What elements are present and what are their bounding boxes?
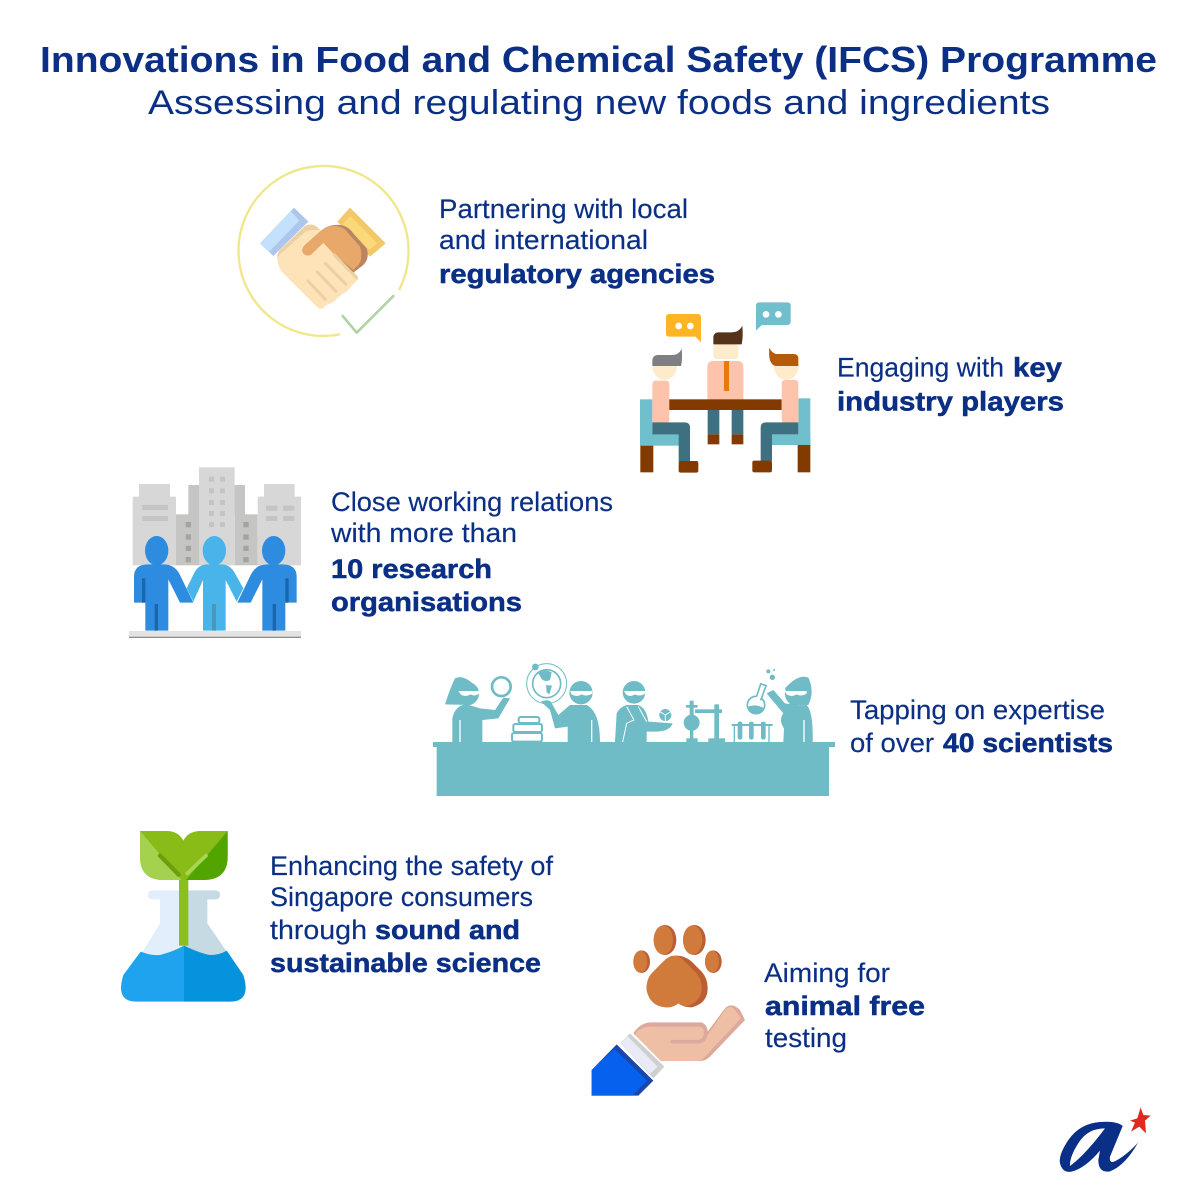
text: key industry players: key bbox=[1013, 352, 1062, 382]
icon: plant in flask bbox=[121, 831, 246, 1002]
text: scientists: Tapping on expertise bbox=[850, 695, 1105, 725]
text: scientists bbox=[850, 695, 1113, 758]
icon: handshake in circle bbox=[239, 166, 408, 336]
text: animal free testing: Aiming for bbox=[764, 958, 890, 988]
text: research organisations bbox=[330, 487, 613, 617]
text: regulatory agencies: Partnering with local bbox=[439, 194, 688, 224]
text: sustainable science: Singapore consumers bbox=[270, 882, 533, 912]
text: research organisations: Close working relations bbox=[331, 487, 613, 517]
scientist with flask bbox=[747, 669, 813, 742]
icon: meeting at table bbox=[640, 302, 810, 473]
text: sustainable science bbox=[270, 851, 553, 978]
text: research organisations: organisations bbox=[331, 587, 522, 617]
lab equipment bbox=[684, 701, 773, 742]
text: sustainable science: through bbox=[270, 915, 367, 945]
title: Innovations in Food and Chemical Safety (IFCS) Programme bbox=[40, 39, 1157, 80]
scientist with globe bbox=[527, 664, 600, 742]
text: key industry players: Engaging with bbox=[837, 352, 1004, 382]
text: sustainable science: sound and bbox=[375, 915, 520, 945]
text: research organisations: with more than bbox=[330, 518, 517, 548]
text: scientists: 40 scientists bbox=[943, 728, 1113, 758]
books bbox=[512, 717, 542, 742]
icon: scientists at lab bench bbox=[433, 664, 835, 796]
text: sustainable science: Enhancing the safety of bbox=[270, 851, 553, 881]
text: sustainable science: sustainable science bbox=[270, 948, 541, 978]
text: regulatory agencies: and international bbox=[439, 225, 648, 255]
text: animal free testing bbox=[764, 958, 925, 1053]
text: key industry players: industry players bbox=[837, 386, 1064, 416]
icon: logo bbox=[1060, 1107, 1151, 1172]
title bbox=[40, 39, 1157, 122]
icon: buildings and people bbox=[129, 467, 301, 638]
text: animal free testing: testing bbox=[765, 1023, 847, 1053]
text: key industry players bbox=[837, 352, 1064, 416]
text: regulatory agencies bbox=[439, 194, 715, 289]
scientist with cube bbox=[615, 681, 673, 742]
title: Assessing and regulating new foods and ingredients bbox=[148, 84, 1050, 122]
icon: paw over hand bbox=[592, 925, 745, 1096]
scientist with magnifier bbox=[445, 677, 511, 742]
text: animal free testing: animal free bbox=[765, 991, 925, 1021]
text: research organisations: 10 research bbox=[331, 554, 492, 584]
text: regulatory agencies: regulatory agencies bbox=[439, 259, 715, 289]
text: scientists: of over bbox=[850, 728, 934, 758]
